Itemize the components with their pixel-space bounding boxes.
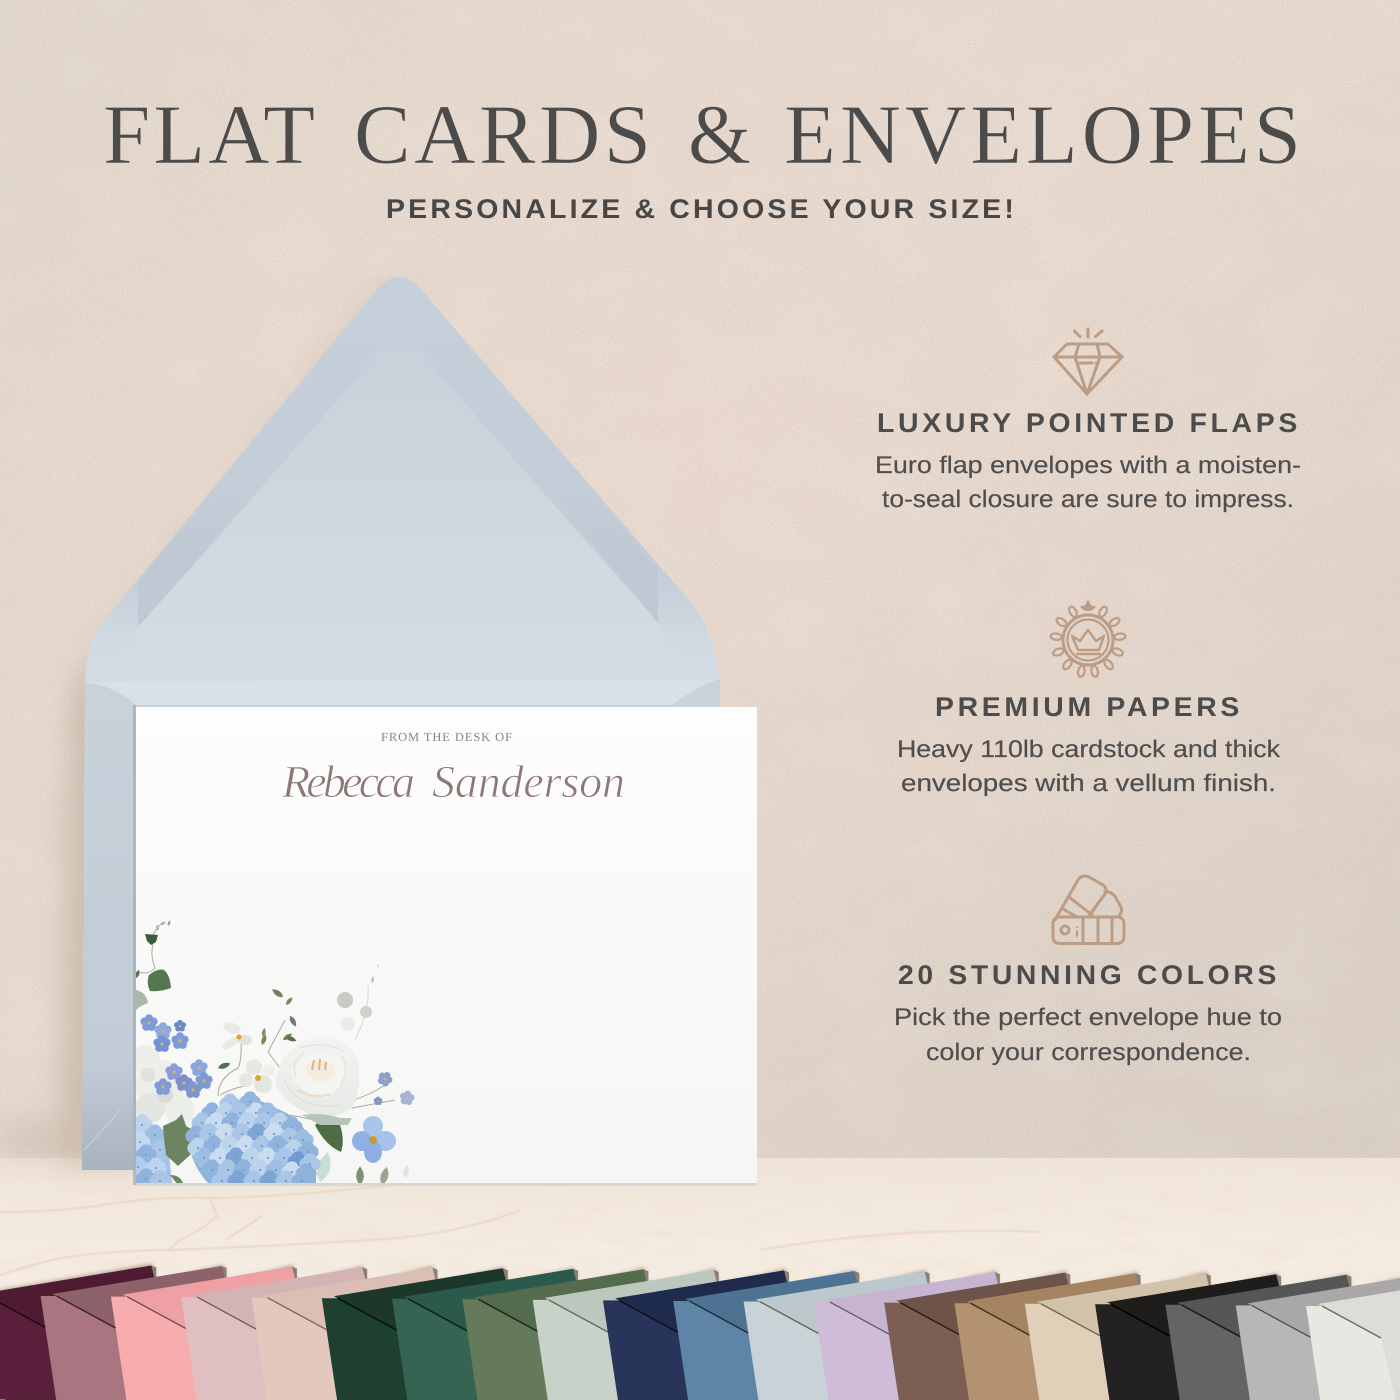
envelope body [82, 680, 720, 1170]
title: FLAT [103, 88, 315, 182]
envelope: emerald [392, 1269, 578, 1400]
envelope color row [0, 1266, 1400, 1400]
envelope: rose beige [252, 1268, 438, 1400]
envelope: blush [181, 1267, 367, 1400]
card face [136, 707, 757, 1183]
pale vine leaves [337, 964, 379, 1031]
description: Pick the perfect envelope hue to [894, 1004, 1282, 1031]
envelope: pink [111, 1267, 297, 1400]
description: Heavy 110lb cardstock and thick [897, 736, 1281, 763]
envelope: sand [1025, 1274, 1211, 1400]
envelope liner [112, 341, 690, 681]
card heading: FROM THE DESK OF [381, 730, 512, 744]
description line two: to-seal closure are sure to impress. [882, 486, 1294, 513]
envelope: pale blue [744, 1272, 930, 1400]
envelope: gray [1236, 1275, 1400, 1400]
shadow behind envelope [0, 278, 400, 1165]
envelope: moss [462, 1269, 648, 1400]
card name: Rebecca [281, 756, 415, 807]
icon: diamond [1054, 329, 1122, 394]
ivy leaves [134, 920, 171, 1010]
envelope: steel blue [673, 1271, 859, 1400]
card name: Sanderson [432, 756, 625, 807]
title: CARDS [354, 88, 651, 182]
subtitle: PERSONALIZE & CHOOSE YOUR SIZE! [386, 194, 1017, 224]
small blue blossoms right [374, 1072, 414, 1106]
small white flowers [220, 1020, 275, 1093]
white hydrangea [136, 1045, 195, 1124]
title: & [688, 88, 751, 182]
sprig leaves [217, 987, 298, 1071]
blue pansy [352, 1116, 396, 1163]
envelope: tan [954, 1273, 1140, 1400]
description: Euro flap envelopes with a moisten- [875, 452, 1301, 479]
envelope row shadow [0, 1264, 1400, 1400]
heading: 20 STUNNING COLORS [898, 960, 1280, 990]
feature: premium papers [897, 601, 1281, 763]
floral corner [127, 920, 415, 1192]
icon: swatch fan [1053, 876, 1124, 944]
envelope side corner [84, 1110, 120, 1150]
heading: PREMIUM PAPERS [935, 692, 1243, 722]
marble counter [0, 1158, 1400, 1400]
liner fold left [138, 440, 270, 627]
title: ENVELOPES [784, 88, 1301, 182]
vine stems [136, 925, 395, 1125]
icon: crown badge [1050, 601, 1126, 677]
blue hydrangea left [136, 1114, 172, 1183]
envelope: cocoa [884, 1273, 1070, 1400]
forget-me-nots [140, 1014, 213, 1098]
envelope flap [85, 277, 720, 683]
envelope: forest green [322, 1268, 508, 1400]
envelope: black [1095, 1274, 1281, 1400]
heading: LUXURY POINTED FLAPS [877, 408, 1301, 438]
envelope: ivory [1306, 1276, 1400, 1400]
envelope: mauve [41, 1266, 227, 1400]
envelope: sage [533, 1270, 719, 1400]
envelope: burgundy [0, 1266, 156, 1400]
blue hydrangea large [185, 1091, 321, 1192]
white rose [276, 1044, 359, 1116]
envelope: charcoal [1165, 1275, 1351, 1400]
feature: twenty stunning colors [894, 876, 1282, 1031]
large green leaves [163, 1114, 410, 1186]
liner fold right [528, 425, 658, 623]
envelope: lilac [814, 1272, 1000, 1400]
note card [127, 705, 757, 1192]
description line two: envelopes with a vellum finish. [901, 770, 1276, 797]
blue envelope [82, 277, 720, 1170]
description line two: color your correspondence. [926, 1039, 1251, 1066]
feature: luxury pointed flaps [875, 329, 1301, 479]
envelope: navy [603, 1270, 789, 1400]
envelope rim [85, 679, 720, 705]
